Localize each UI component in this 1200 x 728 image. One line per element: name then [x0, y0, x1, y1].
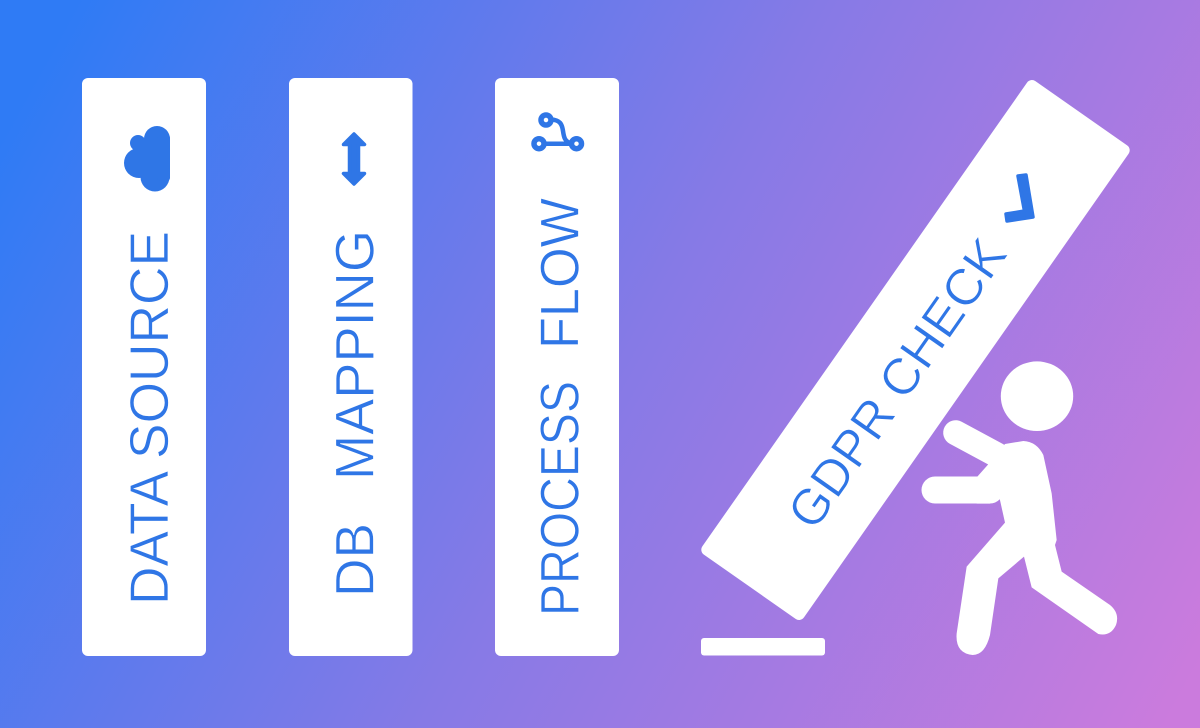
label: gdpr check: CHECK	[867, 228, 1018, 409]
panel: data source	[82, 78, 206, 656]
icon: check mark	[1006, 175, 1033, 221]
label: db mapping: DB	[324, 523, 386, 597]
label: data source: DATA SOURCE	[119, 231, 180, 605]
figure: person pushing	[935, 361, 1117, 655]
icon: process flow nodes	[534, 115, 582, 149]
icon: vertical double arrow	[344, 134, 364, 184]
label: gdpr check	[776, 228, 1018, 539]
label: process flow	[530, 197, 590, 616]
label: db mapping	[324, 230, 386, 597]
head	[1001, 361, 1073, 431]
body and legs	[957, 441, 1117, 655]
panel: db mapping	[289, 78, 412, 656]
lower arm	[935, 476, 990, 504]
label: process flow: PROCESS	[530, 381, 590, 616]
panel: tilted gdpr check	[699, 78, 1132, 622]
label: db mapping: MAPPING	[324, 230, 386, 480]
panel: process flow	[495, 78, 619, 656]
label: gdpr check: GDPR	[776, 387, 906, 539]
icon: cloud	[124, 126, 170, 192]
label: process flow: FLOW	[530, 197, 590, 349]
upper arm	[956, 433, 997, 455]
base bar	[701, 638, 825, 656]
